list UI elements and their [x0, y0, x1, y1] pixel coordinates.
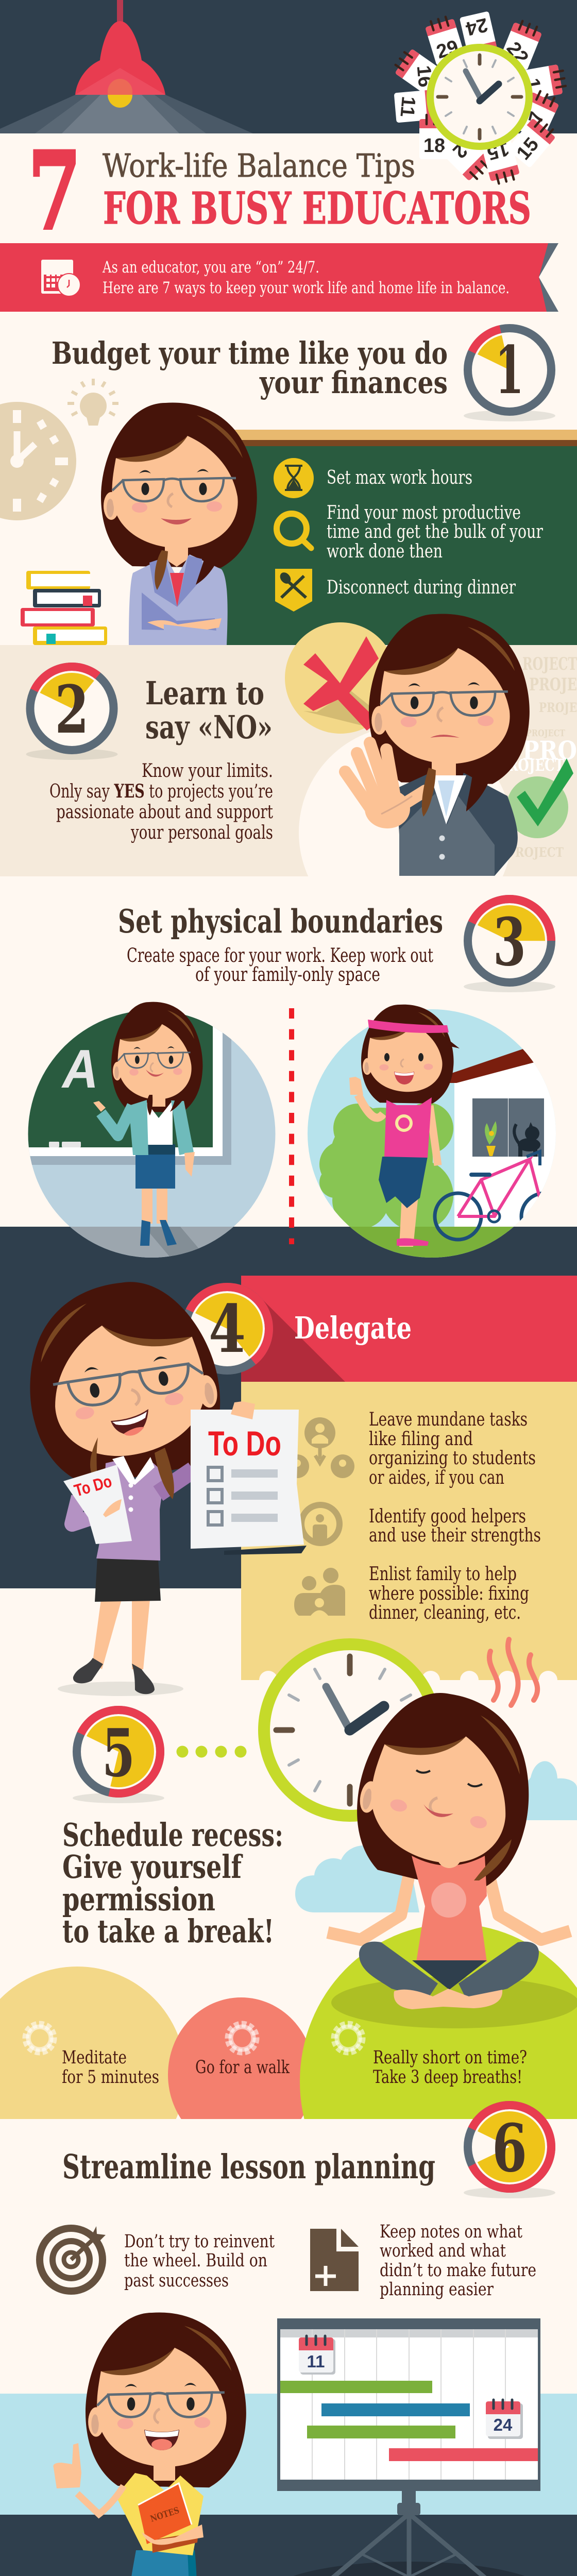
- character: teacher thumbs up: [53, 2312, 246, 2576]
- icon: magnifying glass: [277, 514, 311, 548]
- tips list 1: Disconnect during dinner: [327, 577, 516, 598]
- icon: check mark: [506, 758, 573, 838]
- icon: clock with calendars: [391, 11, 567, 185]
- tips list 4: where possible: fixing: [369, 1583, 529, 1604]
- icon: clock with calendars: 11: [396, 95, 419, 118]
- text: keep notes: worked and what: [380, 2241, 506, 2261]
- icon: clock with calendars: 15: [513, 133, 543, 164]
- text: keep notes: planning easier: [380, 2279, 494, 2300]
- notes book: NOTES: [149, 2505, 181, 2524]
- heading 4: Delegate: [294, 1310, 412, 1346]
- activity labels: Take 3 deep breaths!: [373, 2067, 522, 2088]
- title line one: Work-life Balance Tips: [103, 147, 415, 184]
- heading 5: to take a break!: [62, 1912, 274, 1950]
- tips list 4: dinner, cleaning, etc.: [369, 1602, 521, 1623]
- activity labels: Meditate: [62, 2047, 127, 2068]
- dark band: [0, 1227, 577, 1276]
- background project words: PROJECT: [526, 728, 565, 739]
- icon: hourglass: [274, 458, 314, 498]
- intro text: [102, 258, 510, 297]
- icon: ceiling lamp: [0, 0, 253, 133]
- calendar 11: [299, 2336, 335, 2375]
- section 5: schedule recess: [0, 1639, 577, 2239]
- tips list 4: Enlist family to help: [369, 1564, 517, 1585]
- icon: clock with calendars: 16: [413, 64, 436, 88]
- icon: clock with calendars: 1: [521, 77, 545, 91]
- tips list 4: Leave mundane tasks: [369, 1409, 528, 1430]
- section 2 background: [0, 645, 577, 876]
- badge 6: [454, 2091, 565, 2202]
- text: keep notes: didn’t to make future: [380, 2260, 536, 2281]
- heading 6: Streamline lesson planning: [62, 2147, 435, 2187]
- body text 3: of your family-only space: [195, 963, 380, 986]
- icon: light bulb: [67, 379, 118, 426]
- tips list 4: like filing and: [369, 1429, 473, 1450]
- badge 5: 5: [102, 1715, 135, 1791]
- tips list 4: [369, 1409, 541, 1623]
- tips list 4: organizing to students: [369, 1448, 536, 1469]
- large to-do sheet: To Do: [208, 1424, 281, 1463]
- section 2: learn to say no: [0, 614, 577, 939]
- icon: person in circle: [298, 1502, 343, 1546]
- body text 2: your personal goals: [130, 822, 273, 843]
- heading 2: say «NO»: [145, 708, 273, 746]
- calendar 24: [486, 2400, 523, 2439]
- large to-do sheet: [191, 1401, 307, 1555]
- activity labels: Really short on time?: [373, 2047, 527, 2068]
- icon: fork and knife shield: [275, 569, 312, 612]
- icon: clock with calendars: 22: [502, 38, 533, 69]
- dotted connector: [176, 1745, 246, 1758]
- intro text: As an educator, you are “on” 24/7.: [102, 258, 319, 277]
- icon: clock with calendars: 15: [485, 138, 512, 164]
- house: [454, 1062, 567, 1231]
- tips list 1: Set max work hours: [327, 467, 472, 488]
- heading 2: [145, 674, 273, 746]
- character: child waving: [349, 1005, 460, 1247]
- small to-do sheet: [63, 1465, 132, 1544]
- badge 2: 2: [55, 671, 89, 748]
- chalkboard letter: A: [61, 1039, 98, 1099]
- body text 2: [49, 760, 273, 843]
- text: reinvent the wheel: Don’t try to reinvent: [124, 2231, 275, 2252]
- icon: document with plus: [310, 2229, 359, 2291]
- section 4: delegate: [12, 1269, 577, 1696]
- light circle behind character: [299, 726, 512, 939]
- character: teacher with to-do list: [12, 1269, 307, 1696]
- bicycle: [433, 1149, 541, 1242]
- chalkboard: [216, 430, 577, 645]
- icon: stack of books: [21, 571, 107, 645]
- scalloped edge: [259, 1671, 557, 1689]
- calendar 24: 24: [494, 2415, 513, 2434]
- icon: red X: [285, 622, 396, 734]
- icon: target: [40, 2226, 106, 2291]
- background bands: [0, 2394, 577, 2515]
- closed eyes and smile: [416, 1770, 430, 1773]
- notes book: [138, 2483, 203, 2553]
- calendar 11: 11: [307, 2352, 325, 2371]
- heading 2: Learn to: [145, 674, 264, 712]
- panel: yellow tips: [241, 1382, 577, 1680]
- tips list 1: [327, 467, 544, 598]
- text: reinvent the wheel: [124, 2231, 275, 2291]
- title: [28, 128, 531, 255]
- heading 3: Set physical boundaries: [118, 902, 443, 940]
- badge 4: [172, 1273, 283, 1384]
- section 6: streamline lesson planning: [0, 2091, 577, 2576]
- text: reinvent the wheel: past successes: [124, 2270, 229, 2291]
- hills: [0, 1926, 577, 2119]
- background project words: [507, 654, 577, 860]
- badge shadow: [241, 1296, 345, 1382]
- heading 5: permission: [62, 1880, 215, 1918]
- character: meditating teacher: [328, 1679, 570, 2009]
- title numeral 7: 7: [28, 128, 81, 255]
- heading 5: Give yourself: [62, 1848, 243, 1886]
- clouds: [295, 1761, 577, 1912]
- activity labels: for 5 minutes: [62, 2067, 159, 2088]
- icon: clock with calendars: 2: [448, 139, 471, 162]
- panel: home circle: [304, 1005, 568, 1263]
- gantt chart on tripod: [264, 2318, 554, 2576]
- tips list 1: work done then: [327, 541, 443, 562]
- activity labels: Go for a walk: [195, 2057, 290, 2078]
- cat in window: [514, 1122, 540, 1157]
- icon: clock with calendars: 29: [434, 36, 461, 63]
- heading 5: Schedule recess:: [62, 1816, 283, 1854]
- background project words: ROJECT: [515, 845, 564, 860]
- section 3: set physical boundaries: [0, 885, 577, 1588]
- badge 3: 3: [493, 904, 526, 980]
- tips list 4: or aides, if you can: [369, 1467, 504, 1488]
- heading 1: Budget your time like you do: [52, 335, 448, 371]
- icon: clock with calendars: 18: [423, 135, 445, 157]
- small to-do sheet: To Do: [72, 1471, 114, 1500]
- body text 3: Create space for your work. Keep work out: [127, 944, 433, 967]
- badge 3: [454, 885, 565, 996]
- decorative clock: [0, 402, 76, 520]
- panel: red header: [241, 1276, 577, 1382]
- activity labels: [62, 2047, 527, 2088]
- badge 1: 1: [495, 332, 524, 409]
- text: keep notes: Keep notes on what: [380, 2222, 522, 2242]
- icon: clock with calendars: 24: [464, 13, 490, 40]
- icon: clock with calendars: 17: [522, 109, 549, 136]
- character: teacher with arms crossed: [101, 403, 257, 645]
- character: teacher with hand raised: [345, 614, 530, 876]
- icons: suns: [26, 2024, 362, 2052]
- heading 5: [62, 1816, 283, 1950]
- heading 1: [52, 335, 448, 400]
- body text 3: [127, 944, 433, 986]
- heading 1: your finances: [259, 365, 448, 400]
- tips list 1: Find your most productive: [327, 502, 521, 523]
- body text 2: passionate about and support: [56, 802, 273, 823]
- badge 6: 6: [492, 2110, 527, 2187]
- icon: delegation network: [285, 1417, 354, 1478]
- clock: [264, 1645, 436, 1816]
- body text 2: Only say YES to projects you’re: [49, 781, 273, 802]
- text: keep notes: [380, 2222, 536, 2300]
- body text 2: Know your limits.: [142, 760, 273, 782]
- panel: classroom circle: [28, 1012, 275, 1258]
- text: reinvent the wheel: the wheel. Build on: [124, 2250, 267, 2271]
- steam lines: [489, 1639, 537, 1705]
- intro ribbon: [0, 243, 558, 312]
- bush: [319, 1103, 453, 1231]
- section 1: budget your time: [0, 314, 577, 645]
- badge 1: [454, 314, 565, 426]
- character: teacher at the board: [93, 1002, 202, 1246]
- tips list 4: Identify good helpers: [369, 1506, 526, 1527]
- badge 5: [63, 1696, 174, 1807]
- badge 2: [16, 653, 128, 764]
- badge 4: 4: [209, 1291, 246, 1367]
- plant in window: [485, 1121, 497, 1156]
- divider: [289, 1008, 294, 1244]
- icon: family: [294, 1568, 345, 1616]
- icon: calendar and clock: [41, 260, 80, 296]
- header: dark top band: [0, 0, 577, 133]
